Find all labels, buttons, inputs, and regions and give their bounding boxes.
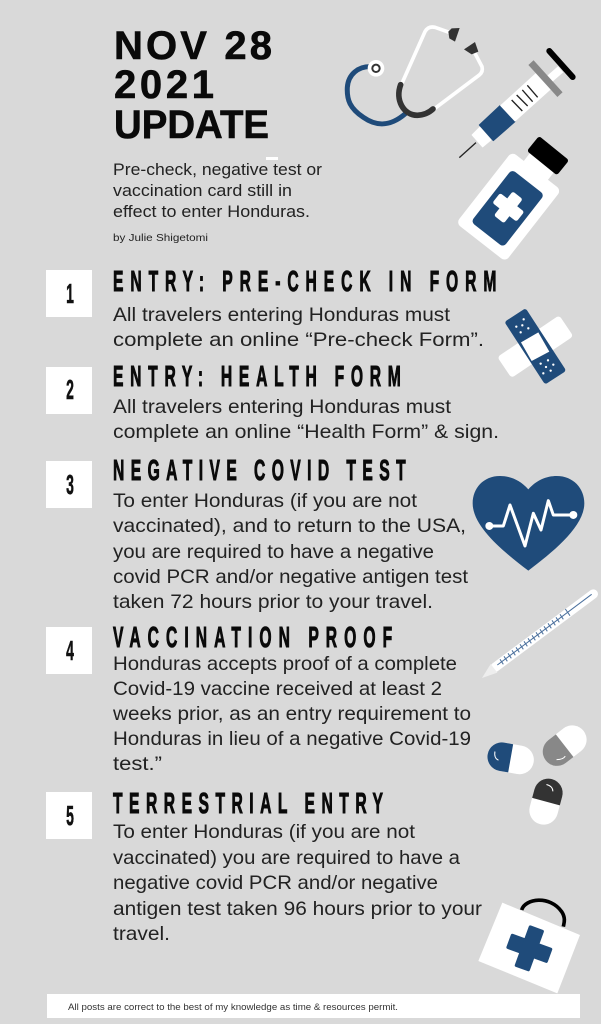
body 4 [112,653,471,775]
heading 3: NEGATIVE COVID TEST [113,454,406,486]
body 4: test.” [113,753,162,775]
icon: medicine bottle [456,136,569,262]
intro text: Pre-check, negative test or [113,161,323,179]
body 2 [113,396,499,443]
number box 5: 5 [66,800,74,831]
number box 4: 4 [66,635,74,666]
footer [47,994,580,1018]
body 5: vaccinated) you are required to have a [113,847,460,869]
pill: black [526,775,566,828]
heading 4: VACCINATION PROOF [113,621,392,653]
step 1 [46,265,496,351]
body 5 [113,821,483,945]
step 4 [46,621,471,775]
step 3 [46,454,469,613]
body 4: Honduras in lieu of a negative Covid-19 [113,728,471,750]
body 2: complete an online “Health Form” & sign. [113,421,499,443]
body 3: covid PCR and/or negative antigen test [113,566,469,588]
body 1 [113,304,484,351]
intro text: vaccination card still in [113,182,292,200]
body 3: taken 72 hours prior to your travel. [113,591,433,613]
icon: heart with pulse [473,476,584,571]
title: UPDATE [114,103,269,147]
body 3: you are required to have a negative [113,541,434,563]
number box 4 [46,627,92,674]
title [114,24,272,147]
step 5 [46,787,483,945]
body 3 [113,490,469,613]
number box 1 [46,270,92,317]
heading 2: ENTRY: HEALTH FORM [113,360,401,392]
number box 3 [46,461,92,508]
byline: by Julie Shigetomi [113,233,208,244]
body 5: negative covid PCR and/or negative [113,872,438,894]
icon: thermometer [482,594,593,678]
icon: bandage [497,308,573,385]
title: NOV 28 [114,24,272,68]
heading 5: TERRESTRIAL ENTRY [113,787,383,819]
body 1: complete an online “Pre-check Form”. [113,329,484,351]
body 4: Covid-19 vaccine received at least 2 [113,678,442,700]
body 5: travel. [113,923,170,945]
body 4: weeks prior, as an entry requirement to [112,703,471,725]
number box 1: 1 [66,278,74,309]
body 4: Honduras accepts proof of a complete [113,653,457,675]
title: 2021 [114,63,214,107]
pill: gray [537,720,592,772]
number box 2 [46,367,92,414]
icon: first aid kit [478,900,580,993]
footer: All posts are correct to the best of my knowledge as time & resources permit. [68,1002,398,1013]
heading 1: ENTRY: PRE-CHECK IN FORM [113,265,496,297]
pill: blue [485,740,536,776]
body 1: All travelers entering Honduras must [113,304,451,326]
body 5: To enter Honduras (if you are not [113,821,416,843]
body 3: vaccinated), and to return to the USA, [113,515,466,537]
intro text: effect to enter Honduras. [113,203,310,221]
step 2 [46,360,499,443]
body 2: All travelers entering Honduras must [113,396,452,418]
body 5: antigen test taken 96 hours prior to your [113,898,483,920]
icon: stethoscope [347,27,482,124]
number box 3: 3 [66,469,74,500]
body 3: To enter Honduras (if you are not [113,490,418,512]
intro text [113,157,323,221]
number box 5 [46,792,92,839]
icon: syringe [459,51,573,158]
number box 2: 2 [66,374,74,405]
icon: pills [485,720,592,828]
